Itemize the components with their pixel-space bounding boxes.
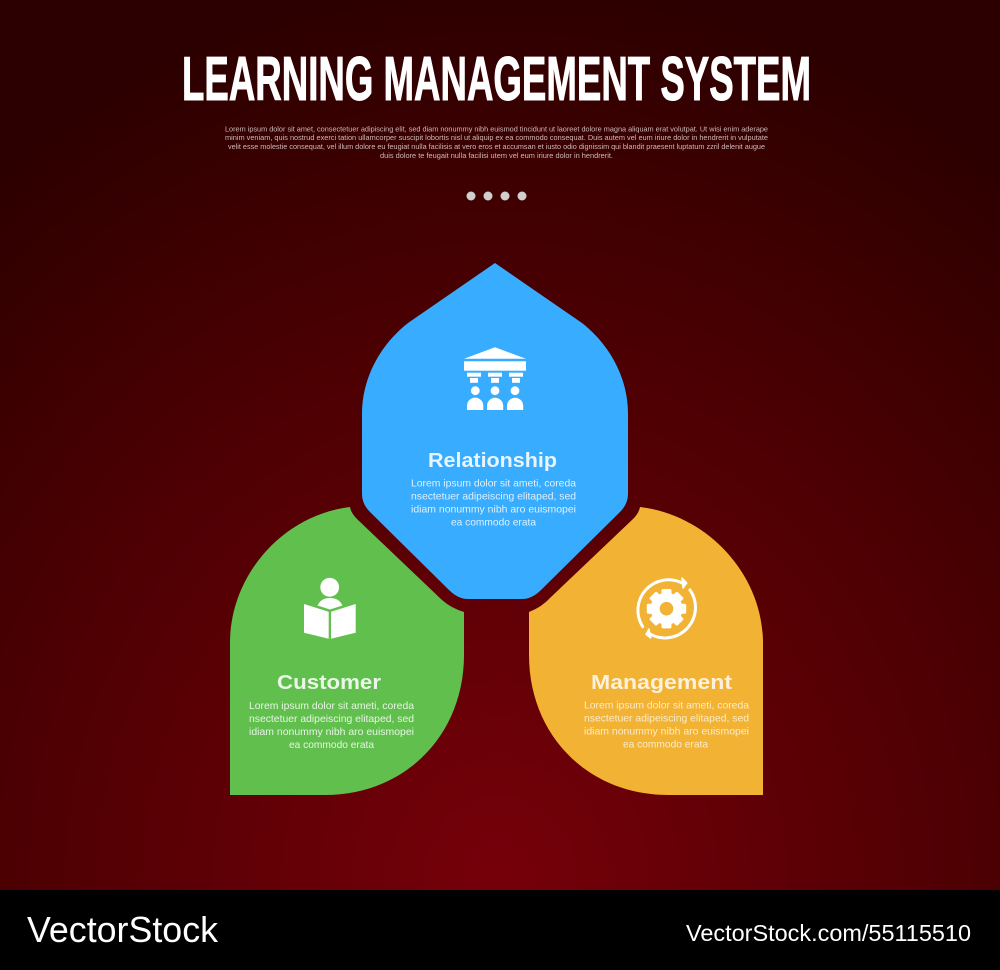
intro paragraph: duis dolore te feugait nulla facilisi utem vel eum iriure dolor in hendrerit. bbox=[380, 151, 613, 160]
body text: customer: Lorem ipsum dolor sit ameti, coreda bbox=[249, 700, 414, 712]
heading: relationship: Relationship bbox=[428, 450, 557, 472]
footer brand: VectorStock bbox=[27, 909, 219, 950]
body text: management: idiam nonummy nibh aro euismopei bbox=[584, 726, 749, 738]
heading: management: Management bbox=[591, 672, 732, 694]
body text: management: ea commodo erata bbox=[623, 738, 708, 750]
body text: customer: nsectetuer adipeiscing elitaped, sed bbox=[249, 713, 414, 725]
green shape bbox=[230, 507, 464, 795]
orange shape bbox=[529, 507, 763, 795]
body text: management: nsectetuer adipeiscing elitaped, sed bbox=[584, 712, 749, 724]
panel: relationship bbox=[362, 263, 628, 599]
body text: relationship: idiam nonummy nibh aro euismopei bbox=[411, 504, 576, 516]
icon: building with people bbox=[464, 347, 526, 410]
body text: customer: idiam nonummy nibh aro euismopei bbox=[249, 726, 414, 738]
blue hexagonal shape bbox=[362, 263, 628, 599]
heading: customer: Customer bbox=[277, 672, 381, 694]
icon: person reading book bbox=[304, 578, 356, 639]
gear bbox=[647, 589, 686, 628]
panel: management bbox=[529, 507, 763, 795]
pagination dots bbox=[466, 192, 526, 200]
intro paragraph: minim veniam, quis nostrud exerci tation ullamcorper suscipit lobortis nisl ut aliquip ex ea commodo consequat. Duis autem vel eum iriure dolor in hendrerit in vulputate bbox=[225, 133, 768, 142]
body text: relationship: nsectetuer adipeiscing elitaped, sed bbox=[411, 491, 576, 503]
panel: customer bbox=[230, 507, 464, 795]
body text: relationship bbox=[411, 478, 576, 528]
intro paragraph: Lorem ipsum dolor sit amet, consectetuer adipiscing elit, sed diam nonummy nibh euismod tincidunt ut laoreet dolore magna aliquam erat volutpat. Ut wisi enim aderape bbox=[225, 124, 768, 134]
footer bar bbox=[0, 890, 1000, 970]
intro paragraph: velit esse molestie consequat, vel illum dolore eu feugiat nulla facilisis at vero eros et accumsan et iusto odio dignissim qui blandit praesent luptatum zzril delenit augue bbox=[228, 142, 765, 151]
body text: relationship: Lorem ipsum dolor sit ameti, coreda bbox=[411, 478, 576, 490]
body text: relationship: ea commodo erata bbox=[451, 516, 536, 528]
footer image id: VectorStock.com/55115510 bbox=[686, 920, 971, 946]
body text: customer bbox=[249, 700, 414, 751]
intro paragraph bbox=[225, 124, 768, 160]
body text: management: Lorem ipsum dolor sit ameti, coreda bbox=[584, 700, 749, 712]
body text: customer: ea commodo erata bbox=[289, 739, 374, 751]
icon: gear with rotating arrows bbox=[638, 578, 695, 638]
body text: management bbox=[584, 700, 749, 750]
rotating arrows bbox=[638, 580, 682, 627]
